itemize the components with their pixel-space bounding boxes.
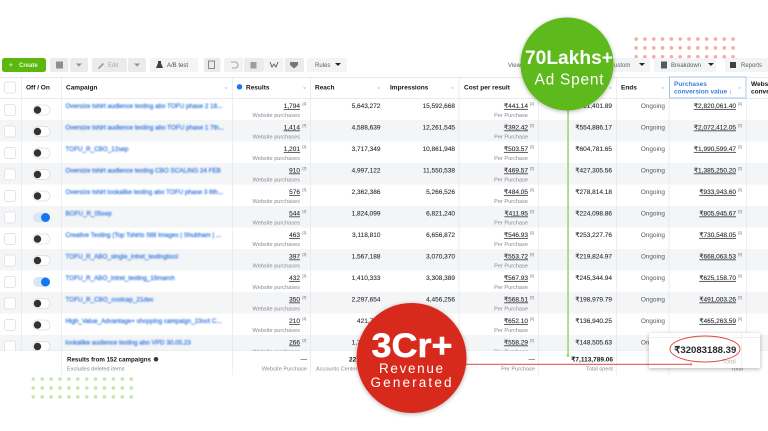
row 11: [2] (302, 317, 306, 321)
callout: revenue generated: 3Cr+ (372, 327, 452, 365)
totals footer: Results from 152 campaigns (67, 356, 151, 364)
row 7: ₹253,227.76 (575, 231, 612, 239)
row 11: ₹465,263.59 (699, 317, 736, 325)
row backgrounds (0, 120, 768, 356)
row 1: [2] (302, 102, 306, 106)
row 4 (4, 166, 742, 183)
totals footer: Per Purchase (501, 366, 535, 372)
totals footer (0, 351, 768, 375)
row 7 (4, 231, 742, 248)
row 10: 350 (289, 296, 300, 304)
table header: Impressions (390, 84, 429, 92)
toolbar (2, 58, 768, 72)
row 7: [2] (530, 231, 534, 235)
row 7: Website purchases (253, 242, 300, 248)
row 3: [2] (530, 145, 534, 149)
row 12: lookalike audience testing abo VPD 30.05.23 (66, 340, 191, 346)
row 9: [2] (302, 274, 306, 278)
row 4: [2] (530, 166, 534, 170)
table header (0, 77, 768, 99)
campaign table screenshot (0, 58, 768, 375)
table header: Campaign (66, 84, 97, 92)
column dividers (22, 77, 746, 375)
row 3: 3,717,349 (352, 146, 381, 153)
row 9 (4, 274, 742, 291)
row 2: ₹2,072,412.05 (694, 124, 736, 132)
row 8: 397 (289, 254, 300, 260)
row 4: ₹427,305.56 (575, 166, 612, 174)
row 8: ₹668,063.53 (699, 252, 736, 260)
row 2: ₹554,886.17 (575, 124, 612, 132)
callout: revenue generated (356, 303, 466, 413)
row 12: 266 (289, 340, 300, 346)
totals footer: Excludes deleted items (67, 366, 125, 372)
table header: Off / On (26, 84, 50, 92)
row 5: 5,266,526 (426, 189, 455, 196)
row 6: 6,821,240 (426, 210, 455, 218)
row 5: [2] (302, 188, 306, 192)
row 4: [2] (302, 166, 306, 170)
row 11: Website purchases (253, 328, 300, 334)
row 4: ₹469.57 (504, 166, 528, 174)
totals footer: Website Purchase (262, 366, 307, 372)
toolbar buttons: Reports (741, 63, 762, 69)
row 1: [2] (738, 102, 742, 106)
row 10 (4, 296, 742, 312)
row 9: 1,410,333 (352, 275, 381, 282)
row 8 (4, 252, 742, 269)
row 6: Ongoing (641, 210, 665, 218)
red connector line (462, 363, 692, 366)
row 4: 910 (289, 168, 300, 174)
row 10: Per Purchase (494, 306, 528, 312)
toolbar buttons: Edit (108, 63, 119, 69)
row 3: [2] (302, 145, 306, 149)
create button (2, 58, 46, 72)
row 4: [2] (738, 166, 742, 170)
row 4: ₹1,385,250.20 (694, 166, 736, 174)
row 10: [2] (302, 296, 306, 300)
row 11: 421,721 (357, 318, 381, 325)
totals footer: — (528, 356, 536, 364)
row 3: [2] (738, 145, 742, 149)
callout: ad spent: Ad Spent (534, 72, 604, 88)
row 1: 1,794 (284, 103, 300, 110)
callout: revenue generated: Generated (370, 375, 452, 390)
row 11: [2] (530, 317, 534, 321)
row 9: ₹567.93 (504, 274, 528, 282)
row 7: ₹730,548.05 (699, 231, 736, 239)
toolbar buttons: Rules (315, 63, 330, 69)
green connector line (566, 100, 570, 357)
row 5: ₹484.05 (504, 188, 528, 196)
callout: revenue generated: Revenue (379, 361, 443, 376)
row 2: 4,588,639 (352, 124, 381, 132)
row 10: [2] (530, 296, 534, 300)
row 7: [2] (738, 231, 742, 235)
row 3: Ongoing (641, 146, 665, 153)
row 10: Website purchases (253, 306, 300, 312)
row 11: ₹652.10 (504, 317, 528, 325)
row 12: [2] (302, 338, 306, 342)
row 11 (4, 317, 742, 334)
row 3 (4, 145, 742, 162)
red highlight ellipse (670, 336, 740, 362)
row 6 (4, 210, 742, 226)
row 6: Per Purchase (494, 220, 528, 226)
row 10: ₹491,003.26 (699, 296, 736, 304)
row 12 (4, 338, 665, 355)
row 10: 4,456,256 (426, 296, 455, 304)
row 3: ₹604,781.65 (575, 145, 612, 153)
row 5: 2,362,386 (352, 189, 381, 196)
row 12: Ongoing (641, 340, 665, 346)
row 6: ₹805,945.67 (699, 210, 736, 218)
row 1: ₹791,401.89 (575, 102, 612, 110)
row 10: TOFU_R_CBO_costcap_21dec (66, 296, 154, 304)
total revenue popup: ₹32083188.39 (674, 345, 736, 356)
row 11: [2] (738, 317, 742, 321)
row 12: ₹148,505.63 (575, 338, 612, 346)
row 8: [2] (738, 252, 742, 256)
row 3: TOFU_R_CBO_12sep (66, 146, 129, 153)
row 9: [2] (738, 274, 742, 278)
totals footer: — (300, 356, 308, 364)
row 7: 6,656,872 (426, 232, 455, 239)
row 11: ₹136,940.25 (575, 317, 612, 325)
row 8: ₹219,824.97 (575, 252, 612, 260)
row 6: [2] (738, 210, 742, 214)
row 1: Per Purchase (494, 113, 528, 119)
row 9: Ongoing (641, 275, 665, 282)
total revenue popup (649, 333, 760, 368)
row 6: ₹411.95 (504, 210, 528, 218)
row 1: Website purchases (253, 113, 300, 119)
row 4: Ongoing (641, 168, 665, 174)
table header: Results (246, 84, 270, 92)
row 11: 210 (289, 318, 300, 325)
row 10: [2] (738, 296, 742, 300)
row 8: [2] (530, 252, 534, 256)
row 7: Per Purchase (494, 242, 528, 248)
table header: Ends (621, 84, 637, 92)
row 10: ₹198,979.79 (575, 296, 612, 304)
row 11: High_Value_Advantage+ shopping campaign_23oct C... (66, 318, 222, 325)
row 3: ₹503.57 (504, 145, 528, 153)
row 12: Per Purchase (494, 349, 528, 355)
create button: Create (19, 63, 38, 69)
row 3: Website purchases (253, 156, 300, 162)
row 1: 5,643,272 (352, 103, 381, 110)
row 2: Per Purchase (494, 134, 528, 140)
table header: Purchases (674, 81, 707, 88)
row 1: ₹441.14 (504, 102, 528, 110)
row 2: [2] (738, 124, 742, 128)
row 2: Website purchases (253, 134, 300, 140)
totals footer: Total (731, 366, 743, 372)
row 9: ₹245,344.94 (575, 274, 612, 282)
row 6: Website purchases (253, 220, 300, 226)
row 3: 10,861,948 (422, 146, 455, 153)
callout: ad spent (520, 18, 614, 110)
row 3: Per Purchase (494, 156, 528, 162)
toolbar buttons: View (508, 63, 522, 69)
totals footer: Accounts Center (316, 366, 357, 372)
totals footer: 22, (349, 356, 358, 364)
row 2 (4, 124, 742, 140)
row 1: 15,592,668 (422, 103, 455, 110)
table header: conversion value ↓ (674, 88, 732, 96)
row 1 (4, 102, 742, 119)
row 5: ₹278,814.18 (575, 188, 612, 196)
row 7: ₹546.93 (504, 231, 528, 239)
row 5 (4, 188, 742, 205)
row 5: Per Purchase (494, 199, 528, 205)
row 1: [2] (530, 102, 534, 106)
decorative pink dot grid (634, 37, 736, 63)
table header: Reach (315, 84, 335, 92)
row 9: ₹625,158.70 (699, 274, 736, 282)
row 6: ₹224,098.86 (575, 210, 612, 218)
row 1: ₹2,820,061.40 (694, 102, 736, 110)
row 1: Ongoing (641, 103, 665, 110)
row 9: 3,308,389 (426, 275, 455, 282)
row 12: ₹558.29 (504, 338, 528, 346)
row 5: [2] (738, 188, 742, 192)
totals footer: ₹7,113,789.06 (571, 356, 613, 364)
row 5: ₹933,943.60 (699, 188, 736, 196)
total revenue popup: Total (722, 358, 736, 366)
row 10: 2,297,654 (352, 296, 381, 304)
row 5: Oversize tshirt lookalike testing abo TOFU phase 3 6th... (66, 189, 223, 196)
row 5: Website purchases (253, 199, 300, 205)
row 1: Oversize tshirt audience testing abo TOFU phase 2 18... (66, 103, 223, 110)
row 2: [2] (302, 124, 306, 128)
row 7: 3,118,810 (352, 232, 381, 239)
row 9: 432 (289, 275, 300, 282)
toolbar buttons (50, 58, 768, 72)
toolbar buttons: A/B test (167, 63, 188, 69)
row 6: 544 (289, 210, 300, 218)
row 8: 3,070,370 (426, 254, 455, 260)
row 9: Per Purchase (494, 285, 528, 291)
row 10: ₹568.51 (504, 296, 528, 304)
row 9: TOFU_R_ABO_intret_testing_16march (66, 275, 175, 282)
decorative green dot grid (32, 377, 134, 399)
row 2: [2] (530, 124, 534, 128)
callout: ad spent: 70Lakhs+ (525, 48, 613, 69)
row 6: [2] (302, 210, 306, 214)
row 5: [2] (530, 188, 534, 192)
row 6: 1,824,099 (352, 210, 381, 218)
row 3: 1,201 (284, 146, 300, 153)
row 2: 1,414 (284, 124, 300, 132)
row 11: Ongoing (641, 318, 665, 325)
row 12: 1,721,000 (352, 340, 381, 346)
row 4: 11,550,538 (423, 168, 455, 174)
row 12: Website purchases (253, 349, 300, 355)
row 8: 1,567,188 (352, 254, 381, 260)
create button: + (9, 62, 13, 69)
row 10: Ongoing (641, 296, 665, 304)
row 6: [2] (530, 210, 534, 214)
row 2: ₹392.42 (504, 124, 528, 132)
row 2: Ongoing (641, 124, 665, 132)
row 7: [2] (302, 231, 306, 235)
totals footer: Total spent (586, 366, 613, 372)
row 7: Ongoing (641, 232, 665, 239)
row 4: Per Purchase (494, 177, 528, 183)
row 2: Oversize tshirt audience testing abo TOFU phase 1 7th... (66, 124, 224, 132)
toolbar buttons: ustom (614, 63, 630, 69)
row 8: [2] (302, 252, 306, 256)
row 7: Creative Testing (Top Tshirts Still Images | Shubham | ... (66, 232, 221, 239)
row 5: 576 (289, 189, 300, 196)
row 8: Ongoing (641, 254, 665, 260)
row 9: [2] (530, 274, 534, 278)
row 11: Per Purchase (494, 328, 528, 334)
table header: Cost per result (464, 84, 511, 92)
row 4: Website purchases (253, 177, 300, 183)
row 4: 4,997,122 (352, 168, 381, 174)
row 12: [2] (530, 338, 534, 342)
row 2: 12,261,545 (422, 124, 455, 132)
toolbar buttons: Breakdown (671, 63, 701, 69)
row 4: Oversize tshirt audience testing CBO SCALING 24 FEB (66, 168, 221, 174)
row 6: BOFU_R_05sep (66, 210, 112, 218)
row 8: Per Purchase (494, 263, 528, 269)
row 5: Ongoing (641, 189, 665, 196)
row 8: ₹553.72 (504, 252, 528, 260)
row 8: TOFU_R_ABO_single_intret_testingbcci (66, 254, 178, 260)
row 8: Website purchases (253, 263, 300, 269)
row 7: 463 (289, 232, 300, 239)
row 9: Website purchases (253, 285, 300, 291)
row 3: ₹1,990,599.47 (694, 145, 736, 153)
